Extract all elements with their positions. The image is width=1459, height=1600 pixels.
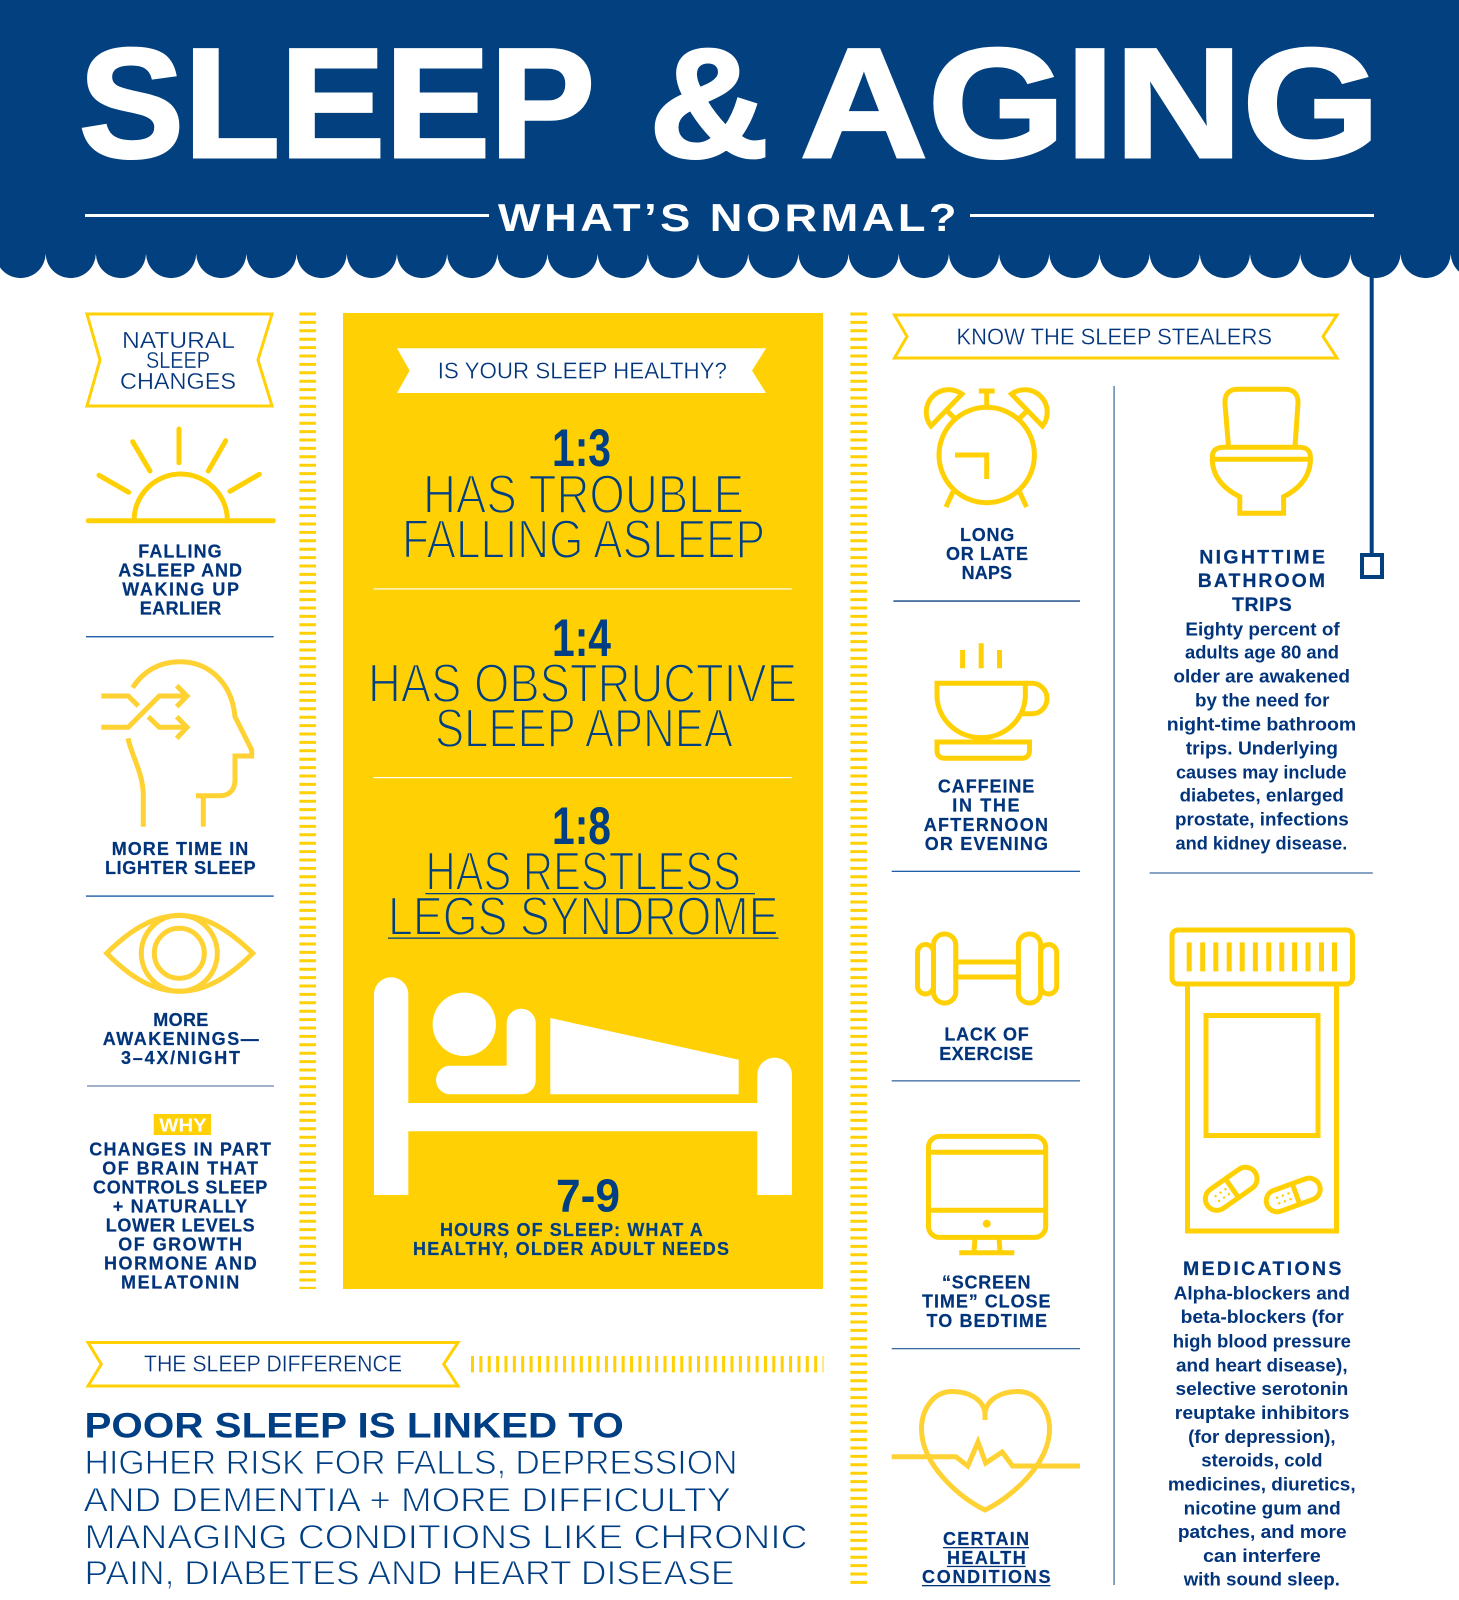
icon: dumbbell [918, 934, 1057, 1003]
banner: the sleep difference [88, 1342, 458, 1386]
text: medications: high blood pressure [1173, 1330, 1351, 1351]
label: long or late naps: NAPS [962, 563, 1012, 583]
label: lighter sleep: LIGHTER SLEEP [105, 858, 256, 878]
text: nighttime bathroom trips: adults age 80 and [1185, 642, 1339, 663]
text: poor sleep is linked to: POOR SLEEP IS LINKED TO [84, 1406, 624, 1445]
stat: 1 in 3: 1:3 [552, 419, 611, 478]
label: falling asleep: EARLIER [140, 598, 221, 618]
text: medications: patches, and more [1178, 1521, 1347, 1542]
title: AGING [800, 17, 1380, 191]
label: long or late naps: LONG [960, 525, 1014, 545]
label: falling asleep [118, 541, 242, 618]
icon: person in bed [374, 977, 792, 1195]
text: medications: can interfere [1203, 1545, 1321, 1566]
banner: is your sleep healthy [397, 348, 766, 393]
header band with scalloped edge [0, 0, 1459, 278]
stat: 1 in 3: HAS TROUBLE [423, 463, 744, 525]
stat: 1 in 8: LEGS SYNDROME [388, 885, 778, 947]
text: medications: steroids, cold [1201, 1450, 1322, 1470]
banner: natural sleep changes: CHANGES [120, 368, 236, 394]
text: medications: (for depression), [1188, 1426, 1336, 1447]
icon: alarm clock [926, 390, 1047, 507]
label: caffeine: AFTERNOON [924, 815, 1048, 835]
label: more awakenings: MORE [153, 1010, 208, 1030]
banner: the sleep difference: THE SLEEP DIFFERENCE [144, 1351, 402, 1377]
text: poor sleep is linked to: PAIN, DIABETES AND HEART DISEASE [84, 1554, 734, 1592]
why tag: WHY [159, 1116, 207, 1136]
label: screen time: TIME” CLOSE [922, 1292, 1050, 1312]
label: caffeine: CAFFEINE [938, 777, 1034, 797]
stat: 1 in 3 [402, 419, 765, 570]
label: long or late naps: OR LATE [946, 544, 1028, 564]
why tag [154, 1114, 211, 1136]
subtitle with side rules: WHAT’S NORMAL? [498, 197, 960, 240]
label: lack of exercise: EXERCISE [939, 1044, 1033, 1064]
icon: toilet [1212, 389, 1310, 513]
why explanation text: + NATURALLY [113, 1197, 247, 1217]
text: medications: MEDICATIONS [1183, 1258, 1341, 1280]
label: screen time: TO BEDTIME [926, 1311, 1047, 1331]
title: SLEEP [79, 17, 595, 191]
stat: 1 in 3: FALLING ASLEEP [402, 508, 765, 570]
label: lack of exercise [939, 1025, 1033, 1064]
text: nighttime bathroom trips: TRIPS [1232, 594, 1292, 616]
label: certain health conditions [922, 1529, 1050, 1587]
text: poor sleep is linked to [84, 1406, 808, 1592]
label: falling asleep: FALLING [138, 541, 222, 561]
text: medications: selective serotonin [1176, 1378, 1348, 1399]
icon: heart with pulse [892, 1392, 1080, 1510]
icon: computer monitor [928, 1136, 1046, 1253]
why explanation text: OF GROWTH [118, 1235, 242, 1255]
text: nighttime bathroom trips: Eighty percent of [1185, 618, 1341, 639]
left dashed column [299, 312, 316, 1289]
label: lighter sleep [105, 839, 256, 878]
stat: 1 in 8: 1:8 [552, 797, 611, 856]
text: medications [1168, 1258, 1356, 1590]
icon: eye [107, 915, 253, 991]
icon: head with arrows [101, 662, 252, 827]
label: screen time [922, 1272, 1050, 1331]
why explanation text: HORMONE AND [104, 1254, 257, 1274]
label: more awakenings [103, 1010, 259, 1068]
banner: natural sleep changes: NATURAL [122, 327, 235, 353]
label: certain health conditions: HEALTH [947, 1548, 1026, 1568]
why explanation text: MELATONIN [121, 1273, 239, 1293]
label: caffeine: IN THE [952, 796, 1020, 816]
text: nighttime bathroom trips [1167, 546, 1356, 853]
icon: coffee cup [937, 643, 1047, 758]
label: caffeine: OR EVENING [925, 834, 1048, 854]
text: medications: medicines, diuretics, [1168, 1474, 1356, 1495]
label: more awakenings: 3–4X/NIGHT [121, 1048, 240, 1068]
text: medications: and heart disease), [1176, 1354, 1348, 1375]
text: nighttime bathroom trips: BATHROOM [1198, 570, 1325, 592]
horizontal dash strip [471, 1356, 824, 1372]
stat: 7-9 hours: 7-9 [556, 1170, 620, 1222]
stat: 1 in 4: HAS OBSTRUCTIVE [368, 652, 797, 714]
banner: natural sleep changes [87, 314, 272, 406]
why explanation text [89, 1140, 271, 1293]
text: medications: beta-blockers (for [1181, 1306, 1344, 1327]
text: nighttime bathroom trips: trips. Underlying [1186, 737, 1338, 758]
stat: 7-9 hours: HEALTHY, OLDER ADULT NEEDS [413, 1239, 729, 1259]
title [79, 17, 1380, 191]
banner: know the sleep stealers: KNOW THE SLEEP STEALERS [956, 323, 1272, 349]
icon: pill bottle [1172, 930, 1352, 1231]
text: nighttime bathroom trips: night-time bathroom [1167, 713, 1356, 734]
label: certain health conditions: CONDITIONS [922, 1567, 1050, 1587]
label: falling asleep: WAKING UP [122, 579, 239, 599]
stat: 1 in 8: HAS RESTLESS [426, 840, 741, 902]
banner: know the sleep stealers [894, 315, 1337, 358]
right dashed column [850, 312, 867, 1586]
subtitle with side rules [85, 197, 1374, 240]
label: screen time: “SCREEN [942, 1272, 1030, 1292]
label: falling asleep: ASLEEP AND [118, 560, 242, 580]
panel: is your sleep healthy [343, 313, 823, 1289]
stat: 1 in 4: 1:4 [552, 609, 611, 668]
stat: 1 in 8 [388, 797, 778, 947]
text: nighttime bathroom trips: older are awakened [1173, 666, 1350, 687]
text: nighttime bathroom trips: causes may include [1176, 761, 1347, 782]
text: medications: with sound sleep. [1183, 1569, 1340, 1590]
stat: 1 in 4 [368, 609, 797, 759]
text: medications: reuptake inhibitors [1175, 1402, 1349, 1423]
banner: is your sleep healthy: IS YOUR SLEEP HEALTHY? [438, 358, 727, 384]
why explanation text: CONTROLS SLEEP [93, 1178, 267, 1198]
stat: 1 in 4: SLEEP APNEA [435, 697, 733, 759]
icon: capsule left [1201, 1163, 1262, 1215]
text: nighttime bathroom trips: and kidney disease. [1176, 832, 1347, 853]
text: poor sleep is linked to: HIGHER RISK FOR FALLS, DEPRESSION [84, 1444, 738, 1482]
label: lighter sleep: MORE TIME IN [112, 839, 248, 859]
text: poor sleep is linked to: AND DEMENTIA + MORE DIFFICULTY [84, 1481, 731, 1519]
why explanation text: LOWER LEVELS [106, 1216, 255, 1236]
text: medications: Alpha-blockers and [1174, 1282, 1350, 1304]
text: poor sleep is linked to: MANAGING CONDITIONS LIKE CHRONIC [84, 1519, 808, 1557]
hanging pull cord [1362, 275, 1382, 577]
icon: sunrise [88, 429, 273, 521]
icon: capsule right [1263, 1175, 1323, 1215]
label: more awakenings: AWAKENINGS— [103, 1029, 259, 1049]
text: nighttime bathroom trips: diabetes, enlarged [1180, 785, 1344, 806]
label: certain health conditions: CERTAIN [943, 1529, 1029, 1549]
title: & [649, 17, 769, 191]
text: nighttime bathroom trips: by the need for [1195, 690, 1329, 711]
stat: 7-9 hours [413, 1170, 729, 1259]
label: caffeine [924, 777, 1048, 854]
text: nighttime bathroom trips: prostate, infections [1175, 809, 1349, 830]
text: nighttime bathroom trips: NIGHTTIME [1199, 546, 1325, 568]
why explanation text: OF BRAIN THAT [102, 1159, 258, 1179]
banner: natural sleep changes: SLEEP [146, 347, 210, 373]
label: long or late naps [946, 525, 1028, 583]
why explanation text: CHANGES IN PART [89, 1140, 271, 1160]
stat: 7-9 hours: HOURS OF SLEEP: WHAT A [440, 1220, 703, 1240]
label: lack of exercise: LACK OF [944, 1025, 1029, 1045]
text: medications: nicotine gum and [1184, 1497, 1341, 1518]
